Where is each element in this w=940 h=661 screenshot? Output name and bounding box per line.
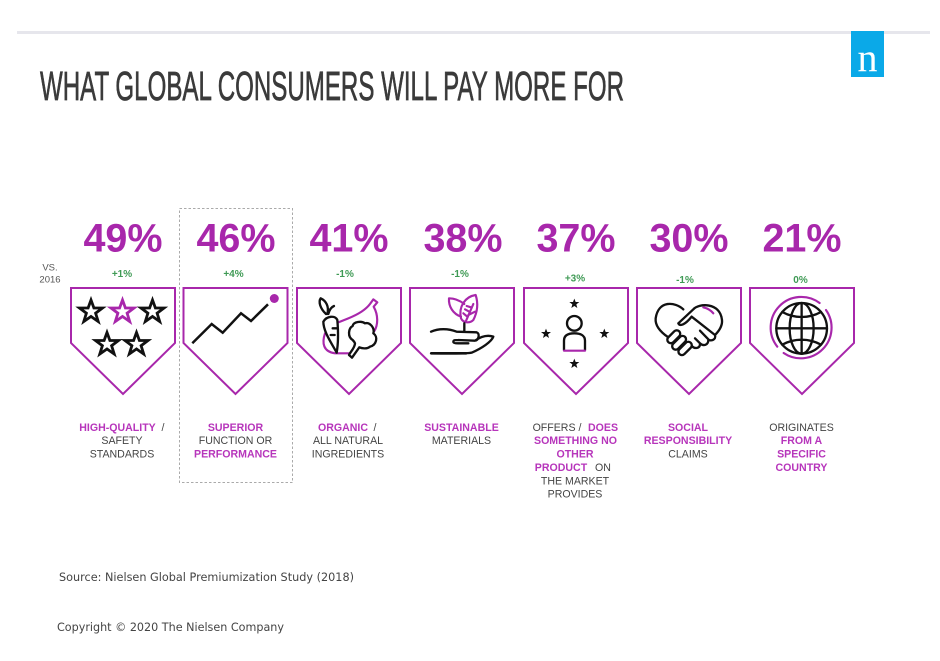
comparison label: vs. 2016 [39,262,61,286]
source note: Source: Nielsen Global Premiumization Study (2018) [59,570,354,584]
label: does something no other product: ON [595,462,611,474]
label: high-quality: HIGH-QUALITY [79,422,156,434]
label: high-quality: STANDARDS [90,448,154,460]
label: social responsibility: RESPONSIBILITY [644,435,732,447]
label: country of origin: SPECIFIC [777,448,826,460]
comparison label: vs. 2016: 2016 [39,274,61,286]
label: does something no other product: SOMETHING NO [534,435,617,447]
label: superior performance: PERFORMANCE [194,448,277,460]
label: does something no other product: PROVIDES [548,488,602,500]
icon: person with stars [541,299,609,368]
label: superior performance: FUNCTION OR [199,435,273,447]
column: country of origin: 0% [793,275,808,286]
column: does something no other product: 37% [536,216,616,260]
column: country of origin [750,216,854,474]
label: does something no other product: DOES [588,422,618,434]
label: does something no other product: OFFERS / [533,422,581,434]
logo: Nielsen [851,31,884,80]
icon: vegetables [320,298,377,358]
column: sustainable: -1% [451,269,469,280]
column: sustainable [410,216,514,447]
column: social responsibility [637,216,741,460]
label: organic: ALL NATURAL [313,435,383,447]
icon: hand and plant [431,295,493,353]
column: social responsibility: 30% [649,216,729,260]
label: country of origin: COUNTRY [776,462,828,474]
column: superior performance [184,216,288,460]
logo: Nielsen: n [858,35,878,80]
icon: five stars [80,300,164,354]
label: country of origin: ORIGINATES [769,422,834,434]
column: sustainable: 38% [423,216,503,260]
label: organic: / [374,422,377,434]
column: high-quality: 49% [83,216,163,260]
column: does something no other product [524,216,628,500]
label: superior performance: SUPERIOR [208,422,264,434]
column: organic: -1% [336,269,354,280]
label: organic: INGREDIENTS [312,448,384,460]
label: sustainable: MATERIALS [432,435,491,447]
label: high-quality: SAFETY [101,435,143,447]
icon: handshake heart [656,304,722,357]
copyright: Copyright © 2020 The Nielsen Company [57,620,284,634]
column: organic: 41% [309,216,389,260]
comparison label: vs. 2016: VS. [42,262,58,274]
label: does something no other product: OTHER [556,448,594,460]
column: high-quality [71,216,175,460]
column: superior performance: +4% [223,269,244,280]
label: social responsibility: SOCIAL [668,422,709,434]
highlight box: dashed outline around superior performance [180,208,292,482]
column: does something no other product: +3% [565,274,585,284]
column: high-quality: +1% [112,269,132,280]
column: social responsibility: -1% [676,275,694,286]
label: high-quality: / [162,422,165,434]
column: superior performance: 46% [196,216,276,260]
column: country of origin: 21% [762,216,842,260]
label: country of origin: FROM A [781,435,823,447]
label: organic: ORGANIC [318,422,368,434]
icon: globe [771,297,832,358]
icon: rising line chart [192,294,279,343]
label: sustainable: SUSTAINABLE [424,422,499,434]
label: does something no other product: PRODUCT [535,462,588,474]
column: organic [297,216,401,460]
label: does something no other product: THE MARKET [541,476,610,488]
label: social responsibility: CLAIMS [668,448,708,460]
